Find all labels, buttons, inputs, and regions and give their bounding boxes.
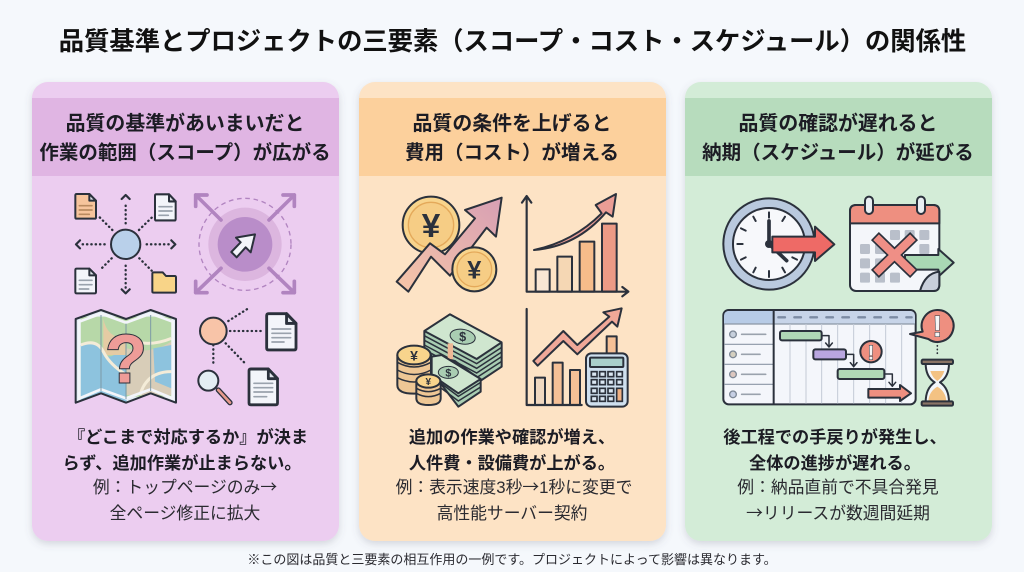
icon: calendar with cross	[850, 197, 954, 291]
icon: banknotes and coin stacks: ¥	[426, 377, 432, 388]
scope example: 全ページ修正に拡大	[110, 504, 261, 523]
cost heading: 費用（コスト）が増える	[405, 141, 619, 164]
icon: chart with calculator	[527, 308, 628, 407]
scope heading: 作業の範囲（スコープ）が広がる	[39, 141, 331, 164]
title: 品質基準とプロジェクトの三要素（スコープ・コスト・スケジュール）の関係性	[59, 28, 966, 56]
icon: alert bubble and hourglass: !	[932, 311, 942, 344]
cost example: 高性能サーバー契約	[437, 504, 587, 523]
cost illustrations	[397, 194, 628, 407]
icon: gantt chart: !	[868, 341, 874, 364]
cost heading: 品質の条件を上げると	[413, 112, 611, 135]
schedule heading: 納期（スケジュール）が延びる	[702, 141, 974, 164]
schedule illustrations	[723, 197, 954, 406]
schedule description: 全体の進捗が遅れる。	[749, 453, 921, 473]
schedule description: 後工程での手戻りが発生し、	[723, 427, 947, 447]
schedule header band	[685, 98, 992, 176]
schedule heading: 品質の確認が遅れると	[739, 111, 937, 135]
icon: map with question mark: ?	[105, 321, 147, 397]
scope header band	[32, 98, 339, 176]
panel: cost	[359, 82, 666, 541]
icon: banknotes and coin stacks: ¥	[410, 347, 418, 363]
icon: clock with delay arrow	[723, 198, 834, 290]
schedule example: 例：納品直前で不具合発見	[737, 478, 939, 497]
cost description: 追加の作業や確認が増え、	[409, 427, 615, 447]
icon: magnifier and documents network	[198, 309, 296, 405]
scope heading: 品質の基準があいまいだと	[66, 111, 304, 135]
icon: alert bubble and hourglass	[910, 310, 954, 406]
scope description: 『どこまで対応するか』が決ま	[68, 427, 308, 447]
icon: expanding cursor	[196, 195, 294, 293]
scope description: らず、追加作業が止まらない。	[62, 453, 302, 473]
cost header band	[359, 98, 666, 176]
icon: yen coins with rising arrow: ¥	[467, 256, 481, 284]
icon: yen coins with rising arrow: ¥	[422, 208, 441, 245]
icon: banknotes and coin stacks	[397, 314, 502, 407]
icon: map with question mark	[76, 310, 176, 403]
icon: gantt chart	[723, 310, 916, 404]
schedule example: →リリースが数週間延期	[746, 500, 930, 524]
icon: rising bar chart	[522, 194, 628, 296]
panel: schedule	[685, 82, 992, 541]
scope illustrations	[75, 194, 296, 405]
icon: yen coins with rising arrow	[397, 197, 502, 292]
footnote: ※この図は品質と三要素の相互作用の一例です。プロジェクトによって影響は異なります。	[247, 552, 777, 567]
cost example: 例：表示速度3秒→1秒に変更で	[396, 474, 632, 498]
cost description: 人件費・設備費が上がる。	[409, 453, 615, 473]
icon: banknotes and coin stacks: $	[459, 330, 466, 344]
icon: spreading documents	[75, 194, 176, 293]
scope example: 例：トップページのみ→	[93, 474, 277, 498]
icon: banknotes and coin stacks: $	[445, 367, 451, 379]
panel: scope	[32, 82, 339, 541]
